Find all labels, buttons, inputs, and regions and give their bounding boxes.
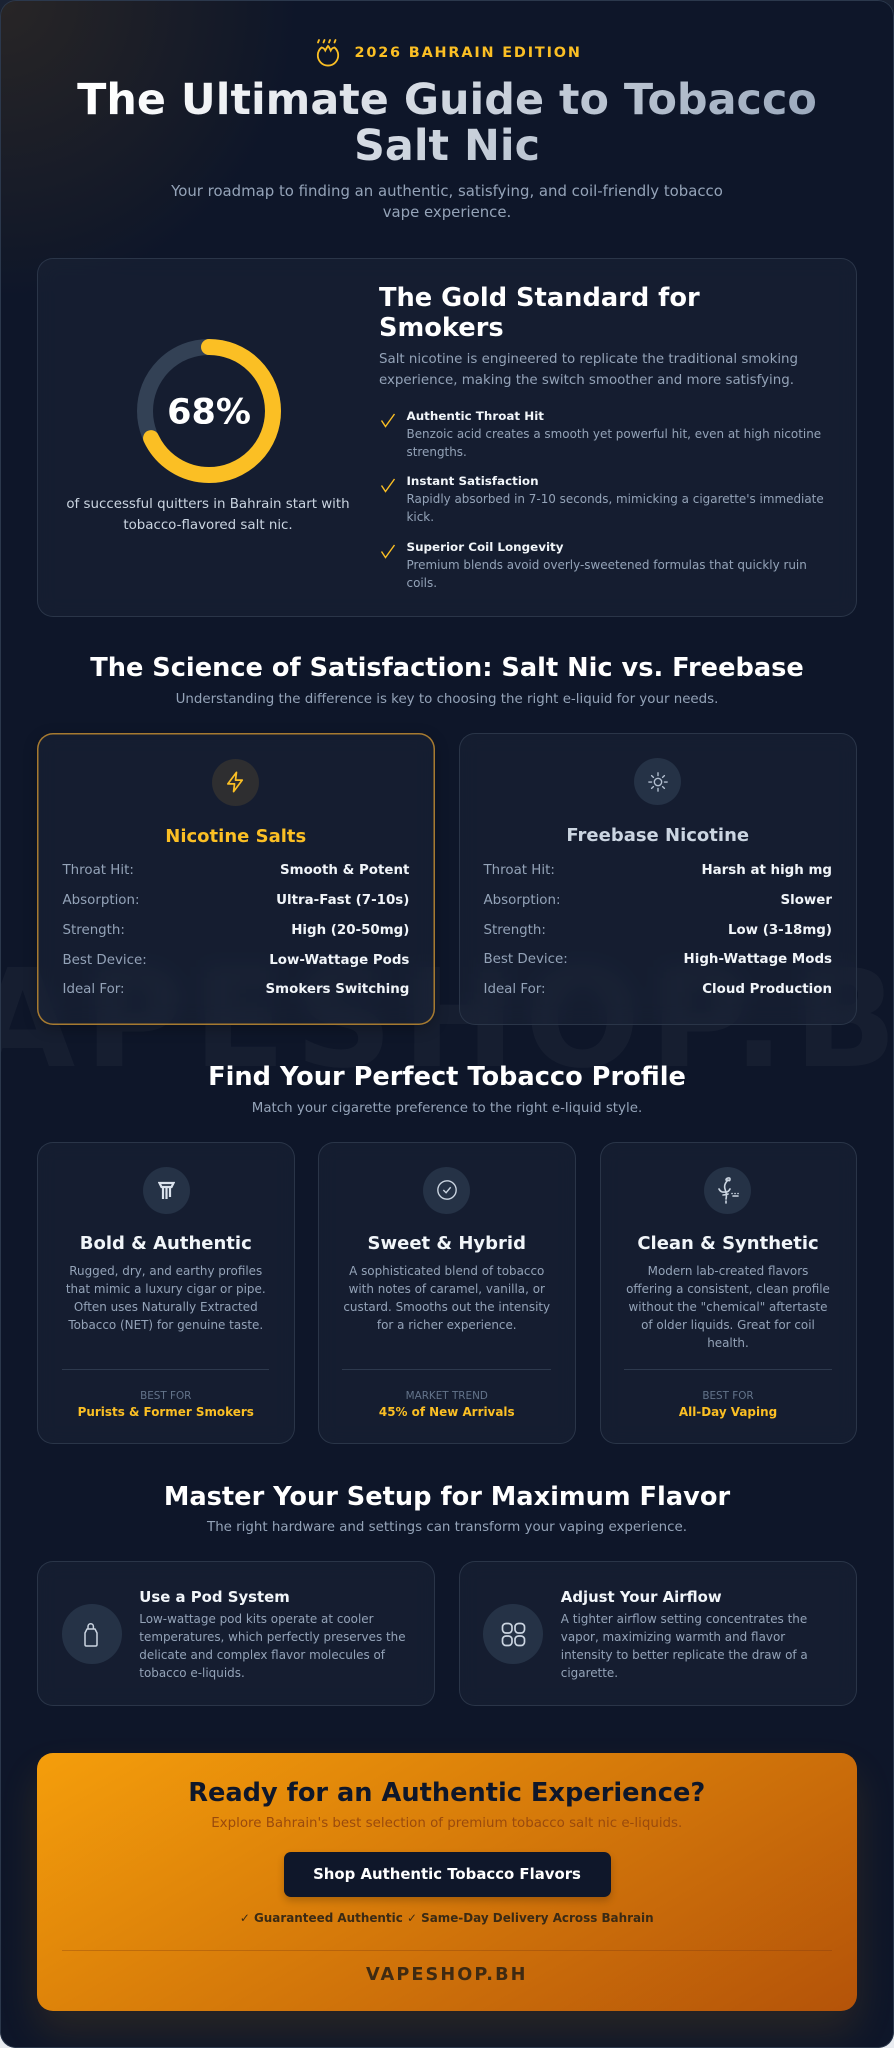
donut caption: tobacco-flavored salt nic.: [123, 518, 293, 533]
footer value: 45% of New Arrivals: [379, 1405, 515, 1419]
row: absorption: Absorption:: [62, 893, 140, 908]
row: ideal for: [484, 982, 832, 996]
subtitle: vape experience.: [383, 203, 511, 221]
intro text: experience, making the switch smoother and more satisfying.: [379, 372, 794, 388]
row: best device: Best Device:: [484, 952, 568, 967]
card title: Bold & Authentic: [80, 1233, 252, 1254]
icon: pod bottle: [62, 1604, 122, 1664]
brand name: VAPESHOP.BH: [366, 1965, 528, 1985]
subtitle: [171, 182, 723, 221]
heading: Master Your Setup for Maximum Flavor: [164, 1482, 730, 1512]
donut chart: 68%: [137, 339, 281, 483]
footer value: Purists & Former Smokers: [78, 1405, 254, 1419]
cta button: Shop Authentic Tobacco Flavors: [313, 1865, 581, 1883]
divider: [624, 1369, 832, 1370]
row: best device: Low-Wattage Pods: [269, 952, 409, 968]
heading: Smokers: [379, 312, 504, 342]
row: absorption: [484, 892, 832, 908]
row: ideal for: Cloud Production: [702, 982, 832, 996]
tip text: cigarette.: [561, 1666, 618, 1680]
item text: coils.: [406, 576, 437, 590]
item text: strengths.: [406, 445, 467, 459]
card text: offering a consistent, clean profile: [626, 1282, 830, 1296]
card text: [626, 1264, 830, 1350]
footer value: All-Day Vaping: [679, 1405, 777, 1419]
item text: Premium blends avoid overly-sweetened formulas that quickly ruin: [406, 558, 807, 572]
panel: bold and authentic: [37, 1142, 294, 1444]
icon: check: [381, 478, 395, 493]
card text: health.: [707, 1336, 749, 1350]
heading: The Gold Standard for: [379, 282, 700, 312]
card text: A sophisticated blend of tobacco: [349, 1264, 544, 1278]
row: ideal for: [62, 982, 409, 997]
section heading: tobacco profile: [208, 1062, 686, 1116]
intro text: [379, 352, 798, 388]
row: ideal for: Smokers Switching: [266, 982, 409, 997]
heading: The Science of Satisfaction: Salt Nic vs. Freebase: [90, 653, 804, 683]
card text: with notes of caramel, vanilla, or: [349, 1282, 545, 1296]
row: absorption: Slower: [780, 892, 832, 908]
footer label: BEST FOR: [702, 1390, 754, 1402]
icon: flask squiggle: [704, 1166, 751, 1214]
row: throat hit: [62, 863, 410, 878]
tip text: A tighter airflow setting concentrates the: [561, 1612, 807, 1626]
panel: sweet and hybrid: [318, 1142, 576, 1444]
footer label: MARKET TREND: [406, 1390, 488, 1402]
section heading: setup: [164, 1482, 730, 1534]
row: best device: [484, 952, 832, 967]
row: throat hit: Smooth & Potent: [280, 863, 409, 878]
card text: without the "chemical" aftertaste: [629, 1300, 827, 1314]
card text: Often uses Naturally Extracted: [74, 1300, 258, 1314]
card text: for a richer experience.: [377, 1318, 517, 1332]
item title: Superior Coil Longevity: [406, 540, 563, 554]
header: [77, 39, 817, 221]
icon: check: [381, 544, 395, 559]
row: absorption: [62, 893, 409, 908]
tip text: temperatures, which perfectly preserves the: [139, 1630, 406, 1644]
card text: Rugged, dry, and earthy profiles: [69, 1264, 262, 1278]
tip text: [560, 1612, 808, 1680]
panel: nicotine salts: [37, 733, 434, 1025]
row: best device: High-Wattage Mods: [684, 952, 832, 967]
donut chart: 68%: 68%: [167, 392, 250, 432]
icon: flame crown: [316, 39, 340, 66]
item title: Authentic Throat Hit: [406, 409, 544, 423]
intro text: Salt nicotine is engineered to replicate the traditional smoking: [379, 352, 798, 366]
icon: lightning bolt: [212, 759, 259, 806]
tip text: Low-wattage pod kits operate at cooler: [139, 1612, 374, 1626]
list item: satisfaction: [381, 474, 824, 524]
item text: [406, 427, 821, 459]
row: ideal for: Ideal For:: [62, 982, 125, 997]
icon: check: [381, 414, 395, 428]
subheading: Match your cigarette preference to the right e-liquid style.: [252, 1101, 642, 1116]
card title: Nicotine Salts: [165, 826, 306, 846]
tip text: delicate and complex flavor molecules of: [139, 1648, 385, 1662]
row: strength: Strength:: [62, 923, 125, 938]
title: [37, 78, 857, 170]
icon: sun: [634, 758, 681, 805]
tip text: vapor, maximizing warmth and flavor: [561, 1630, 785, 1644]
comparison rows: [62, 863, 410, 997]
tip text: intensity to better replicate the draw of a: [561, 1648, 808, 1662]
item text: Rapidly absorbed in 7-10 seconds, mimicking a cigarette's immediate: [406, 492, 824, 506]
card text: custard. Smooths out the intensity: [343, 1300, 550, 1314]
row: strength: [484, 922, 832, 938]
heading: Find Your Perfect Tobacco Profile: [208, 1062, 686, 1092]
row: best device: [62, 952, 409, 968]
section heading: science: [90, 653, 804, 707]
row: throat hit: [483, 862, 832, 878]
panel: pod system tip: [37, 1561, 434, 1706]
eyebrow label: 2026 BAHRAIN EDITION: [354, 45, 582, 61]
divider: [62, 1369, 269, 1370]
row: strength: Strength:: [484, 922, 546, 938]
list item: throat hit: [381, 409, 821, 459]
heading: [379, 282, 700, 342]
donut caption: of successful quitters in Bahrain start with: [66, 497, 350, 512]
panel: gold standard: [37, 258, 856, 617]
cta subtitle: Explore Bahrain's best selection of premium tobacco salt nic e-liquids.: [211, 1816, 682, 1831]
title: The Ultimate Guide to Tobacco: [77, 75, 817, 125]
row: ideal for: Ideal For:: [484, 982, 546, 996]
row: throat hit: Throat Hit:: [62, 863, 134, 878]
tip text: [139, 1612, 406, 1680]
item title: Instant Satisfaction: [406, 474, 539, 488]
item text: [406, 558, 807, 590]
card text: Tobacco (NET) for genuine taste.: [68, 1318, 263, 1332]
row: strength: [62, 923, 409, 938]
row: strength: Low (3-18mg): [728, 922, 832, 938]
row: absorption: Ultra-Fast (7-10s): [276, 893, 409, 908]
subtitle: Your roadmap to finding an authentic, satisfying, and coil-friendly tobacco: [171, 182, 723, 200]
cta title: Ready for an Authentic Experience?: [188, 1778, 705, 1808]
tip title: Use a Pod System: [139, 1588, 290, 1606]
row: throat hit: Harsh at high mg: [701, 862, 832, 878]
card text: [343, 1264, 550, 1332]
panel: freebase nicotine: [459, 733, 856, 1025]
donut caption: [66, 497, 350, 533]
footer label: BEST FOR: [140, 1390, 191, 1402]
row: throat hit: Throat Hit:: [484, 862, 555, 878]
item text: [406, 492, 824, 524]
divider: [62, 1950, 832, 1951]
guarantee line: ✓ Guaranteed Authentic ✓ Same-Day Delivery Across Bahrain: [240, 1911, 654, 1925]
row: strength: High (20-50mg): [291, 923, 409, 938]
title: Salt Nic: [354, 120, 540, 170]
divider: [342, 1369, 551, 1370]
icon: check circle: [423, 1166, 470, 1214]
tip title: Adjust Your Airflow: [561, 1588, 722, 1606]
card text: that mimic a luxury cigar or pipe.: [66, 1282, 266, 1296]
card text: [66, 1264, 266, 1332]
card title: Clean & Synthetic: [637, 1233, 819, 1254]
list item: coil longevity: [381, 540, 807, 590]
card title: Sweet & Hybrid: [368, 1233, 526, 1254]
row: absorption: Absorption:: [484, 892, 560, 908]
row: best device: Best Device:: [62, 952, 147, 968]
icon: cigar: [142, 1166, 190, 1214]
icon: airflow grid: [483, 1604, 543, 1664]
panel: airflow tip: [459, 1561, 856, 1706]
card text: Modern lab-created flavors: [648, 1264, 808, 1278]
item text: kick.: [406, 510, 434, 524]
item text: Benzoic acid creates a smooth yet powerful hit, even at high nicotine: [406, 427, 821, 441]
cta button: [284, 1852, 610, 1897]
card text: of older liquids. Great for coil: [641, 1318, 815, 1332]
card title: Freebase Nicotine: [566, 825, 749, 846]
subheading: The right hardware and settings can transform your vaping experience.: [207, 1520, 687, 1534]
panel: clean and synthetic: [600, 1142, 856, 1444]
tip text: tobacco e-liquids.: [139, 1666, 245, 1680]
subheading: Understanding the difference is key to choosing the right e-liquid for your needs.: [176, 692, 718, 707]
comparison rows: [483, 862, 832, 996]
panel: call to action: [37, 1753, 856, 2010]
